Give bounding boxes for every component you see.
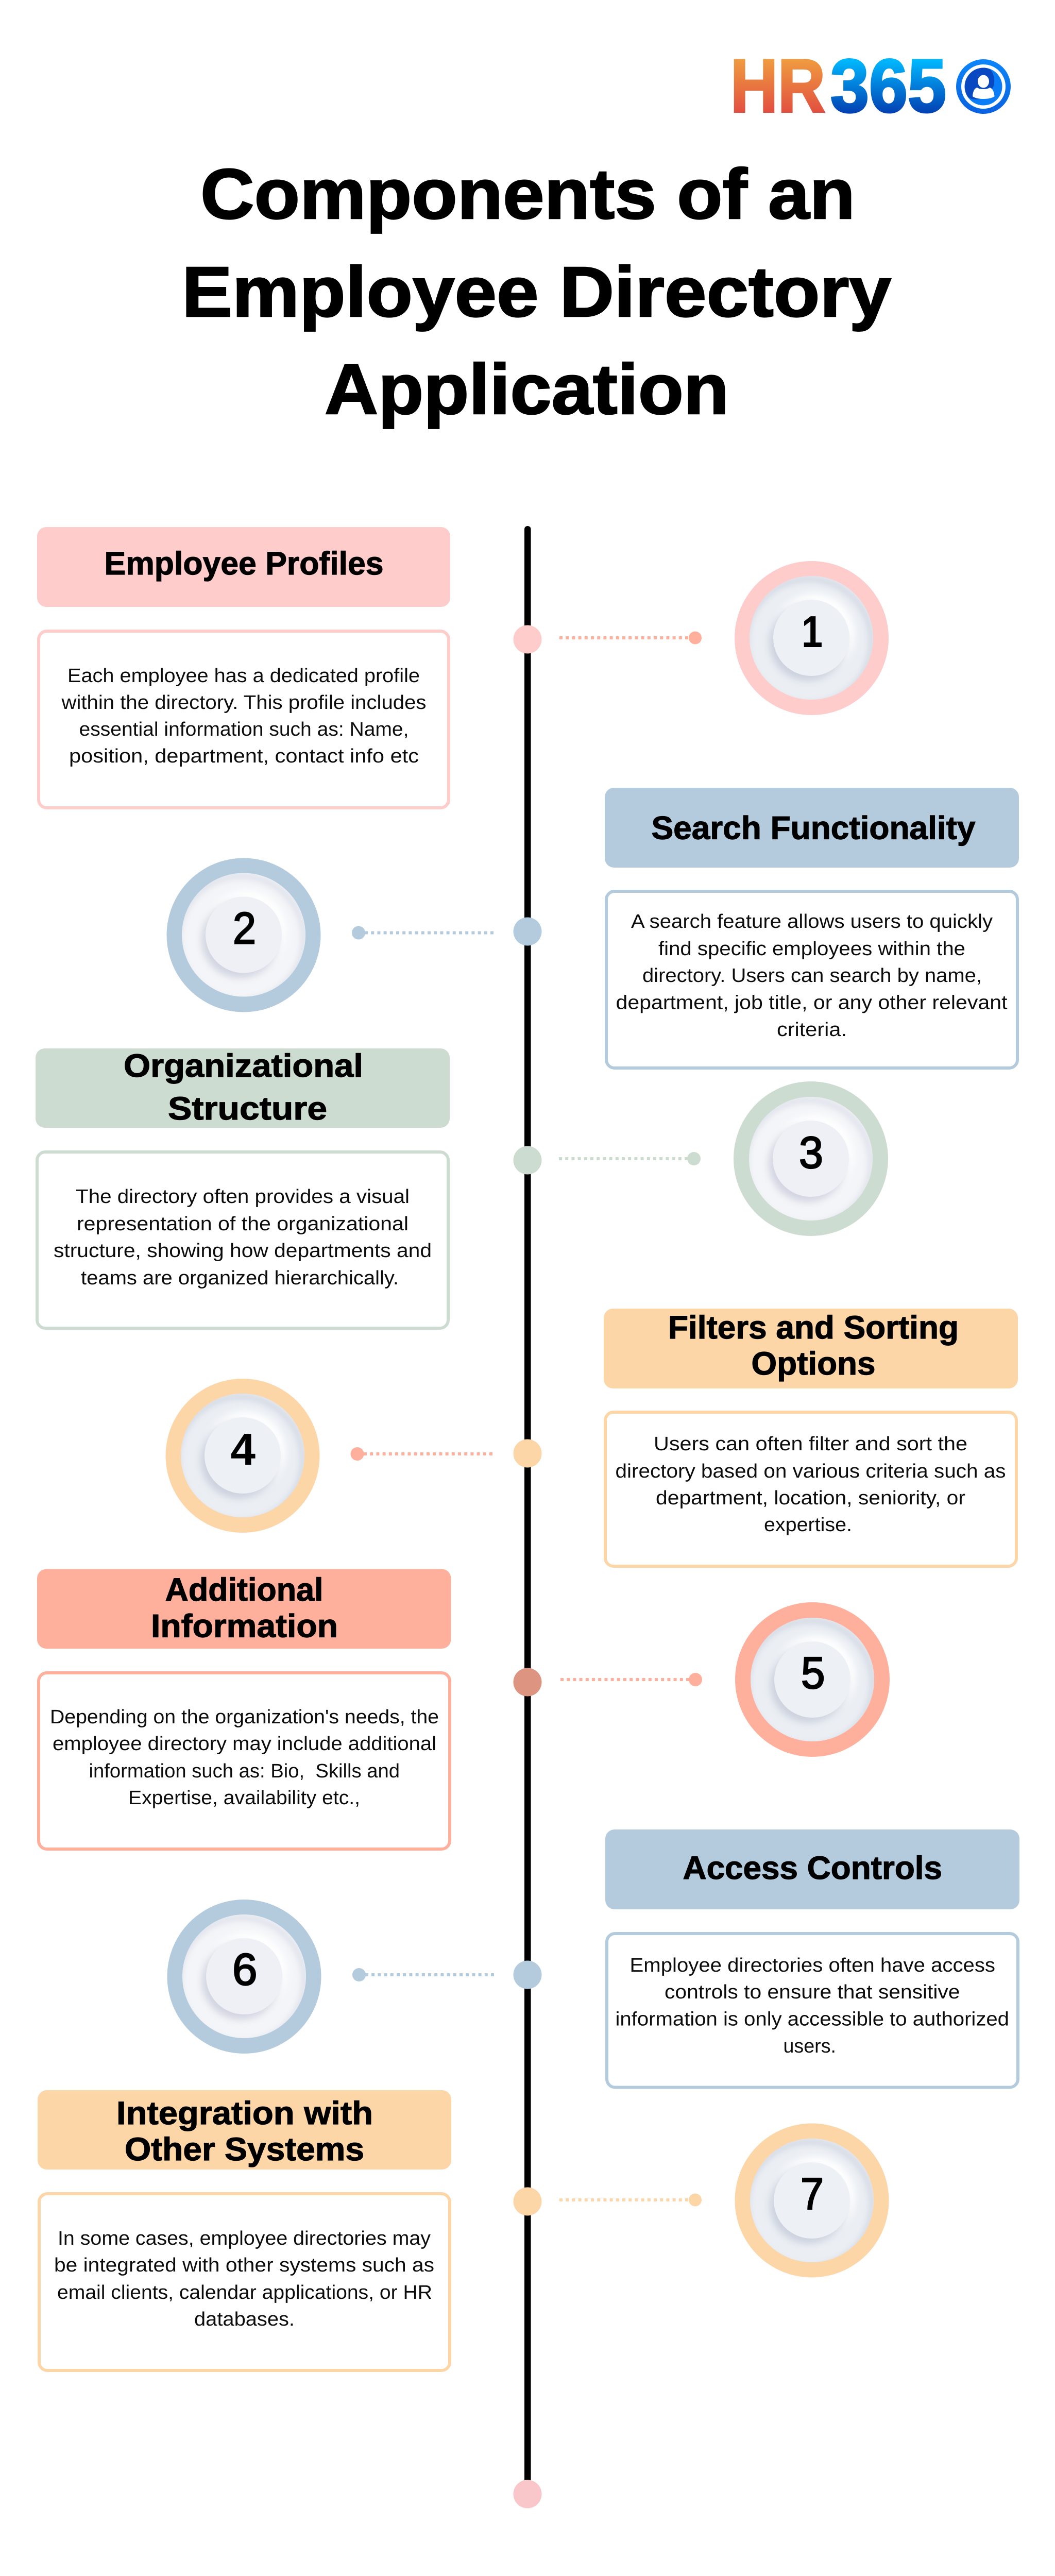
panel: step 7 Integration with Other Systems <box>38 2090 451 2370</box>
body text <box>54 2228 434 2330</box>
body text: employee directory may include additional <box>53 1733 436 1755</box>
body text: information such as: Bio, Skills and <box>89 1760 400 1782</box>
body text <box>616 911 1008 1041</box>
heading bar <box>605 788 1019 868</box>
body text: directory based on various criteria such as <box>615 1461 1006 1482</box>
timeline node 1 <box>513 625 542 653</box>
text box <box>606 891 1017 1068</box>
body text: Depending on the organization's needs, the <box>50 1706 439 1728</box>
timeline end node <box>513 2480 542 2508</box>
step 1 number badge: 1 <box>802 607 823 657</box>
title: Employee Directory <box>182 252 891 332</box>
panel: step 2 Search Functionality <box>605 788 1019 1068</box>
step 5 number badge: 5 <box>801 1648 825 1698</box>
step 2 number badge <box>167 858 320 1012</box>
body text: representation of the organizational <box>77 1213 409 1235</box>
panel: step 5 Additional Information <box>37 1569 451 1849</box>
step 4 number badge: 4 <box>231 1425 256 1475</box>
body text: databases. <box>194 2309 295 2330</box>
panel: step 4 Filters and Sorting Options <box>604 1309 1018 1566</box>
logo: HR365 <box>730 44 1008 128</box>
heading bar <box>605 1829 1019 1909</box>
body text: email clients, calendar applications, or HR <box>57 2282 432 2303</box>
body text: find specific employees within the <box>658 938 965 960</box>
heading bar <box>604 1309 1018 1388</box>
timeline node 7 <box>513 2188 542 2215</box>
body text: be integrated with other systems such as <box>54 2255 434 2276</box>
body text: criteria. <box>777 1019 847 1041</box>
heading: Organizational <box>124 1048 363 1084</box>
step 6 number badge <box>167 1900 321 2054</box>
heading <box>116 2095 373 2167</box>
heading bar <box>38 2090 451 2170</box>
step 4 connector <box>350 1447 492 1461</box>
body text: department, job title, or any other relevant <box>616 992 1008 1014</box>
body text <box>615 1433 1006 1536</box>
panel: step 3 Organizational Structure <box>36 1048 450 1328</box>
heading <box>124 1048 363 1127</box>
timeline node 4 <box>513 1439 542 1467</box>
body text: within the directory. This profile includes <box>61 692 426 714</box>
heading <box>151 1572 338 1645</box>
heading: Other Systems <box>125 2131 364 2167</box>
step 7 number badge: 7 <box>801 2169 824 2219</box>
body text <box>54 1186 432 1289</box>
body text: directory. Users can search by name, <box>642 965 982 987</box>
body text: Each employee has a dedicated profile <box>67 665 420 687</box>
step 2 number badge: 2 <box>233 904 256 953</box>
body text: structure, showing how departments and <box>54 1240 432 1262</box>
text box <box>37 1152 448 1328</box>
timeline node 2 <box>513 917 542 946</box>
text box <box>39 631 449 808</box>
step 1 number badge <box>735 561 889 715</box>
step 3 number badge <box>734 1081 888 1236</box>
step 6 number badge: 6 <box>232 1944 258 1995</box>
step 3 number badge: 3 <box>799 1128 823 1178</box>
timeline node 5 <box>513 1668 542 1696</box>
step 7 number badge <box>735 2124 889 2277</box>
heading: Filters and Sorting <box>668 1310 959 1346</box>
body text <box>615 1955 1009 2057</box>
text box <box>39 1673 450 1849</box>
step 1 connector <box>559 632 702 644</box>
title: Application <box>325 350 729 429</box>
heading: Options <box>751 1346 876 1382</box>
body text: teams are organized hierarchically. <box>81 1267 399 1289</box>
step 2 connector <box>352 926 494 940</box>
step 7 connector <box>559 2194 702 2206</box>
logo text 365: 365 <box>830 44 946 128</box>
body text <box>50 1706 439 1809</box>
text box <box>607 1934 1018 2088</box>
heading bar <box>37 527 450 607</box>
logo text HR: HR <box>730 44 825 128</box>
body text: position, department, contact info etc <box>69 745 419 767</box>
title: Components of an <box>200 155 855 234</box>
body text: department, location, seniority, or <box>656 1487 965 1509</box>
timeline node 3 <box>513 1146 542 1175</box>
body text <box>61 665 426 767</box>
body text: controls to ensure that sensitive <box>665 1981 960 2003</box>
body text: In some cases, employee directories may <box>58 2228 431 2249</box>
step 5 connector <box>560 1673 702 1686</box>
step 6 connector <box>352 1968 494 1981</box>
heading: Integration with <box>116 2095 373 2131</box>
body text: information is only accessible to authorized <box>615 2008 1009 2030</box>
heading: Employee Profiles <box>104 546 383 582</box>
body text: users. <box>783 2036 836 2057</box>
heading: Additional <box>165 1572 324 1608</box>
heading <box>668 1310 959 1382</box>
body text: Expertise, availability etc., <box>128 1787 360 1809</box>
panel: step 6 Access Controls <box>605 1829 1019 2088</box>
timeline node 6 <box>513 1961 542 1989</box>
step 3 connector <box>559 1152 701 1165</box>
title <box>182 155 891 429</box>
heading: Structure <box>168 1091 327 1127</box>
step 5 number badge <box>735 1602 890 1757</box>
body text: expertise. <box>764 1514 852 1536</box>
body text: essential information such as: Name, <box>79 719 409 740</box>
heading bar <box>37 1569 451 1649</box>
body text: Users can often filter and sort the <box>654 1433 967 1455</box>
panel: step 1 Employee Profiles <box>37 527 450 808</box>
heading bar <box>36 1048 450 1128</box>
body text: The directory often provides a visual <box>76 1186 410 1208</box>
timeline spine <box>524 526 531 2492</box>
icon: person in circle <box>959 62 1008 111</box>
heading: Information <box>151 1608 338 1645</box>
body text: Employee directories often have access <box>629 1955 995 1976</box>
text box <box>39 2194 450 2370</box>
heading: Search Functionality <box>651 810 976 846</box>
step 4 number badge <box>166 1379 319 1533</box>
heading: Access Controls <box>683 1850 942 1886</box>
text box <box>605 1412 1016 1566</box>
body text: A search feature allows users to quickly <box>631 911 993 933</box>
